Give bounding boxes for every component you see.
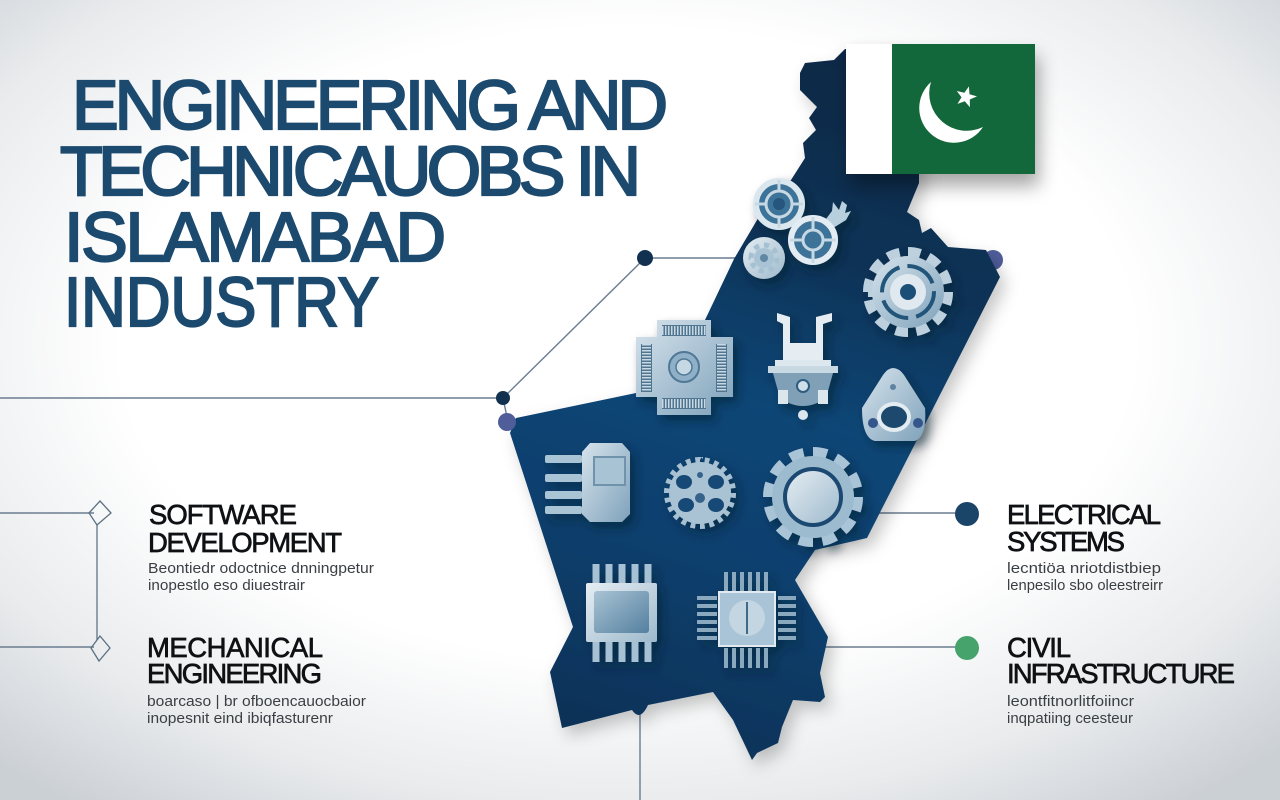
callout: mechanical engineering: inopesnit eind ibiqfasturenr: [147, 710, 333, 727]
callout: civil infrastructure: leontfitnorlitfoiincr: [1007, 693, 1134, 710]
callout: mechanical engineering: MECHANICAL: [147, 632, 323, 663]
callout: software development: inopestlo eso diuestrair: [148, 577, 305, 594]
icon: microchip left: [586, 564, 657, 662]
callout: civil infrastructure: CIVIL: [1007, 632, 1071, 663]
callout: mechanical engineering: [91, 632, 366, 727]
node dot: [955, 636, 979, 660]
icon: microchip right: [697, 572, 796, 668]
callout: software development: Beontiedr odoctnice dnningpetur: [148, 560, 374, 577]
title: INDUSTRY: [64, 263, 379, 341]
callout: electrical systems: ELECTRICAL: [1007, 499, 1161, 530]
map of Pakistan: [510, 49, 1000, 760]
callout: mechanical engineering: boarcaso | br ofboencauocbaior: [147, 693, 366, 710]
diamond node: [89, 501, 111, 525]
callout: mechanical engineering: ENGINEERING: [147, 658, 322, 689]
icon: robotic claw: [768, 313, 838, 420]
callout: electrical systems: lenpesilo sbo oleestreirr: [1007, 577, 1163, 594]
title: ISLAMABAD: [64, 198, 446, 276]
node: upper connector: [637, 250, 653, 266]
callout: software development: DEVELOPMENT: [148, 527, 342, 558]
node: left connector: [496, 391, 510, 405]
title: [60, 66, 668, 341]
callout: electrical systems: SYSTEMS: [1007, 526, 1125, 557]
callout: civil infrastructure: INFRASTRUCTURE: [1007, 658, 1235, 689]
title: TECHNICAUOBS IN: [60, 132, 641, 210]
icon: connector module: [545, 443, 630, 522]
icon: gear cluster with wrench: [743, 180, 851, 279]
icon: triangular bracket: [862, 368, 925, 441]
node dot: [955, 502, 979, 526]
callout: electrical systems: [955, 499, 1163, 594]
title: ENGINEERING AND: [72, 66, 668, 144]
diamond node: [91, 636, 110, 661]
node: purple connector: [498, 413, 516, 431]
icon: small toothed gear: [667, 460, 733, 526]
icon: square processor: [636, 320, 733, 415]
icon: large gear top: [868, 252, 948, 332]
icon: large gear centre: [769, 453, 857, 541]
flag of Pakistan: [846, 44, 1035, 174]
callout: civil infrastructure: inqpatiing ceesteur: [1007, 710, 1133, 727]
callout: software development: [89, 499, 374, 594]
callout: civil infrastructure: [955, 632, 1235, 727]
callout: software development: SOFTWARE: [149, 499, 297, 530]
callout: electrical systems: lecntiöa nriotdistbiep: [1007, 560, 1161, 577]
connector lines: [0, 258, 956, 800]
node: top right purple: [983, 250, 1003, 270]
